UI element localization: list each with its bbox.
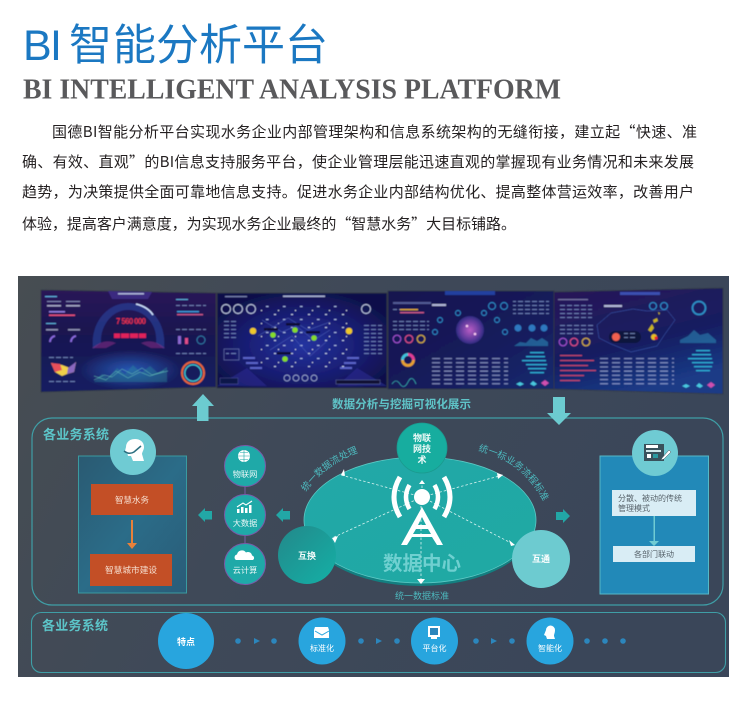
screen 1: overview dashboard [41, 290, 216, 392]
feature node: standardized: 标准化 [310, 643, 334, 653]
feature node: characteristics [158, 613, 214, 669]
arrow: to tech circles [276, 508, 290, 522]
step: smart city: 智慧城市建设 [105, 564, 157, 575]
arrow: up to screens [192, 394, 214, 421]
arrow: to right box [556, 509, 570, 523]
arrow: orange down [127, 520, 137, 549]
node: exchange: 互换 [298, 550, 316, 561]
data center ellipse [304, 457, 536, 586]
arrow: to left box [198, 508, 212, 522]
node: IoT technology: 术 [417, 454, 427, 465]
main system frame [32, 418, 723, 605]
step: department linkage: 各部门联动 [634, 549, 674, 559]
title: Chinese heading: BI智能分析平台 [23, 22, 328, 70]
feature node: intelligent [526, 618, 574, 664]
step: smart water: 智慧水务 [115, 495, 149, 505]
connector dots 1 [235, 638, 277, 644]
connector dots 2 [358, 638, 400, 644]
screen 2: network map [217, 293, 387, 388]
dashboard screens [41, 288, 723, 394]
curved label: business flow: 统一标业务流程标准 [478, 444, 549, 501]
step: passive management: 分散、被动的传统 [618, 493, 682, 503]
feature node: standardized [298, 618, 346, 664]
circle: big data: 大数据 [233, 518, 257, 528]
intro text block: 确、有效、直观”的BI信息支持服务平台，使企业管理层能迅速直观的掌握现有业务情况和未来发展 [22, 151, 694, 172]
panel background [18, 276, 729, 677]
intro text block: 趋势，为决策提供全面可靠地信息支持。促进水务企业内部结构优化、提高整体营运效率，改善用户 [22, 181, 694, 202]
step: smart city [90, 554, 172, 586]
connector dots 3 [473, 638, 515, 644]
arrow: down from screens [547, 397, 571, 425]
label: data standard: 统一数据标准 [395, 590, 449, 601]
node: interconnect [512, 530, 570, 588]
title: English subheading: BI INTELLIGENT ANALYSIS PLATFORM [23, 74, 561, 106]
left process box [78, 429, 186, 593]
node: IoT technology: 网技 [413, 443, 431, 454]
node: IoT technology [397, 423, 447, 473]
step: smart water [91, 484, 173, 515]
connector dots 4 [584, 638, 626, 644]
curved label: data flow: 统一数据流处理 [300, 446, 358, 492]
feature node: intelligent: 智能化 [538, 643, 562, 653]
intro text block: 国德BI智能分析平台实现水务企业内部管理架构和信息系统架构的无缝衔接，建立起“快速、准 [52, 121, 697, 142]
dashed connectors [332, 475, 513, 581]
node: IoT technology: 物联 [413, 432, 431, 443]
step: passive management: 管理模式 [618, 503, 650, 513]
panel: platform diagram [18, 276, 729, 677]
icon: signal tower [394, 477, 450, 545]
screen 3: big data centre [388, 291, 554, 389]
icon: operator headset [110, 429, 156, 475]
red digit pills [114, 334, 146, 338]
node: exchange [278, 526, 336, 584]
right process box [600, 430, 708, 594]
icon: form and pencil [632, 430, 678, 476]
heading: business systems: 各业务系统 [43, 427, 109, 442]
heading: data visualization: 数据分析与挖掘可视化展示 [332, 397, 471, 411]
intro text block: 体验，提高客户满意度，为实现水务企业最终的“智慧水务”大目标铺路。 [22, 213, 516, 234]
step: passive management [612, 490, 696, 516]
label: data center: 数据中心 [383, 553, 461, 575]
heading: business systems: 各业务系统 [42, 618, 108, 633]
circle: cloud: 云计算 [233, 565, 257, 575]
features frame [32, 612, 726, 672]
big number: 7 560 000 [116, 317, 147, 326]
feature node: platform [411, 618, 458, 664]
arrow: light down [649, 516, 659, 546]
circle: IoT: 物联网 [233, 469, 257, 479]
feature node: characteristics: 特点 [177, 636, 195, 647]
screen 4: regional map [554, 288, 723, 394]
intro text block [22, 121, 697, 234]
technology circles [224, 446, 266, 584]
step: department linkage [613, 546, 695, 562]
feature node: platform: 平台化 [422, 643, 446, 653]
node: interconnect: 互通 [532, 554, 550, 564]
